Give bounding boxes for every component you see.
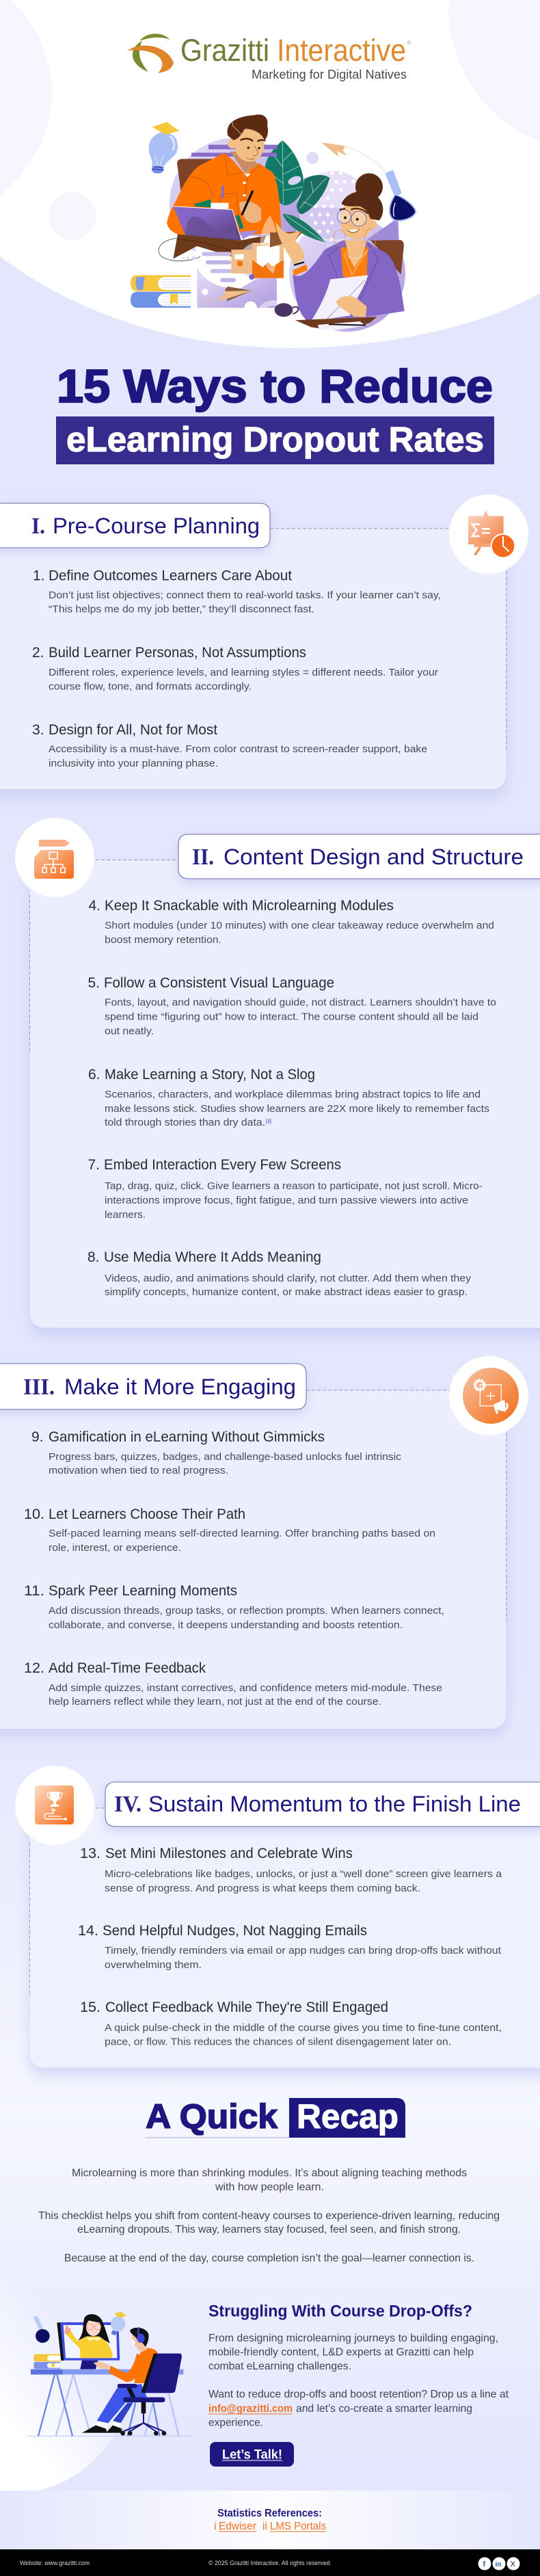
recap heading: A Quick: [146, 2097, 278, 2136]
recap text: This checklist helps you shift from content-heavy courses to experience-driven learning, reducing: [38, 2210, 500, 2222]
item 12: [24, 1660, 442, 1708]
section II heading: II.: [192, 845, 214, 870]
item 7: 7.: [87, 1157, 100, 1173]
header white blob with soft corner shapes: [0, 0, 540, 348]
item 5: Follow a Consistent Visual Language: [104, 975, 334, 991]
illustration: online learner at desk: [27, 2312, 193, 2436]
recap text: Because at the end of the day, course completion isn’t the goal—learner connection is.: [64, 2253, 474, 2264]
hero illustration: two colleagues working: [131, 114, 416, 333]
recap text: eLearning dropouts. This way, learners stay focused, feel seen, and finish strong.: [77, 2224, 461, 2235]
icon: social links: in: [495, 2561, 501, 2568]
item 9: [31, 1429, 402, 1476]
item 6: 6.: [88, 1067, 100, 1083]
recap text: with how people learn.: [215, 2181, 324, 2193]
call to action: mobile-friendly content, L&D experts at Grazitti can help: [208, 2347, 474, 2359]
item 5: Fonts, layout, and navigation should guide, not distract. Learners shouldn’t have to: [105, 997, 496, 1008]
logo: Grazitti Interactive: Grazitti: [180, 33, 269, 68]
item 4: boost memory retention.: [105, 934, 221, 946]
item 3: Accessibility is a must-have. From color contrast to screen-reader support, bake: [49, 743, 427, 755]
item 11: Add discussion threads, group tasks, or reflection prompts. When learners connect,: [49, 1605, 444, 1617]
title: 15 Ways to Reduce: [57, 360, 493, 412]
statistics references band: Statistics References:: [217, 2508, 322, 2519]
item 10: role, interest, or experience.: [49, 1542, 181, 1554]
item 9: 9.: [31, 1429, 44, 1445]
item 2: 2.: [32, 645, 44, 661]
item 14: [78, 1923, 502, 1971]
item 13: sense of progress. And progress is what keeps them coming back.: [105, 1883, 420, 1894]
call to action: combat eLearning challenges.: [208, 2361, 351, 2372]
call to action: and let’s co-create a smarter learning: [296, 2403, 472, 2415]
item 7: learners.: [105, 1209, 146, 1221]
logo: Grazitti Interactive: Marketing for Digital Natives: [252, 68, 407, 81]
item 7: Embed Interaction Every Few Screens: [104, 1157, 341, 1173]
logo: Grazitti Interactive: ®: [407, 40, 411, 46]
section I heading: [0, 503, 270, 548]
section II heading: [178, 834, 540, 879]
subtitle banner: eLearning Dropout Rates: [66, 420, 484, 459]
item 3: Design for All, Not for Most: [49, 722, 217, 738]
recap text: [38, 2168, 500, 2264]
section II panel: Content Design and Structure: [15, 818, 540, 1328]
item 14: Send Helpful Nudges, Not Nagging Emails: [103, 1923, 367, 1939]
item 5: spend time “figuring out” how to interact. The course content should all be laid: [105, 1011, 478, 1023]
item 5: out neatly.: [105, 1026, 154, 1037]
item 8: 8.: [87, 1249, 100, 1265]
item 2: course flow, tone, and formats accordingly.: [49, 681, 252, 692]
item 8: Videos, audio, and animations should clarify, not clutter. Add them when they: [105, 1273, 472, 1284]
bottom left white glow: [0, 2252, 131, 2494]
item 13: 13.: [80, 1846, 100, 1861]
item 3: inclusivity into your planning phase.: [49, 758, 218, 769]
call to action: experience.: [208, 2417, 263, 2429]
footer: © 2025 Grazitti Interactive. All rights reserved.: [208, 2560, 332, 2567]
item 11: [24, 1583, 444, 1631]
item 15: [80, 2000, 502, 2048]
item 8: [87, 1249, 472, 1298]
section IV heading: IV.: [114, 1792, 141, 1817]
item 1: “This helps me do my job better,” they’ll disconnect fast.: [49, 604, 314, 615]
item 9: Progress bars, quizzes, badges, and challenge-based unlocks fuel intrinsic: [49, 1451, 402, 1463]
translucent steam swirl: [258, 215, 288, 333]
icon: gear, plus and megaphone: [449, 1356, 528, 1435]
statistics references band: LMS Portals: [270, 2521, 326, 2532]
item 11: collaborate, and converse, it deepens understanding and boosts retention.: [49, 1619, 403, 1631]
button: Let's Talk: Let’s Talk!: [222, 2448, 282, 2462]
call to action: Want to reduce drop-offs and boost retention? Drop us a line at: [208, 2389, 509, 2400]
recap heading: Recap: [297, 2097, 399, 2136]
item 11: Spark Peer Learning Moments: [49, 1583, 237, 1599]
item 4: Short modules (under 10 minutes) with one clear takeaway reduce overwhelm and: [105, 920, 494, 931]
item 3: 3.: [32, 722, 44, 738]
item 1: Don’t just list objectives; connect them to real-world tasks. If your learner can’t say,: [49, 589, 441, 601]
item 7: Tap, drag, quiz, click. Give learners a reason to participate, not just scroll. Micro-: [105, 1180, 483, 1192]
call to action: [208, 2302, 509, 2467]
item 8: simplify concepts, humanize content, or make abstract ideas easier to grasp.: [105, 1286, 468, 1298]
item 1: Define Outcomes Learners Care About: [49, 568, 292, 584]
item 6: make lessons stick. Studies show learners are 22X more likely to remember facts: [105, 1103, 489, 1115]
item 1: [33, 568, 441, 615]
icon: easel and clock: [449, 494, 528, 574]
item 14: 14.: [78, 1923, 98, 1939]
section I heading: Pre-Course Planning: [53, 514, 260, 538]
statistics references band: ii: [262, 2521, 267, 2532]
item 14: Timely, friendly reminders via email or app nudges can bring drop-offs back without: [105, 1945, 502, 1956]
item 6: [88, 1067, 489, 1128]
item 5: [87, 975, 496, 1037]
icon: social links: X: [510, 2560, 515, 2568]
section I panel: Pre-Course Planning: [0, 494, 528, 789]
section III panel: Make it More Engaging: [0, 1356, 528, 1729]
item 3: [32, 722, 427, 769]
item 10: Let Learners Choose Their Path: [49, 1506, 245, 1522]
item 10: Self-paced learning means self-directed learning. Offer branching paths based on: [49, 1528, 435, 1539]
statistics references band: i: [214, 2521, 216, 2532]
footer: Website: www.grazitti.com: [20, 2560, 90, 2567]
item 7: [87, 1157, 483, 1221]
section IV panel: Sustain Momentum to the Finish Line: [15, 1766, 540, 2068]
section III heading: III.: [23, 1375, 55, 1400]
item 2: Different roles, experience levels, and learning styles = different needs. Tailor your: [49, 667, 438, 678]
icon: document with flow chart: [15, 818, 94, 897]
statistics references band: [0, 2491, 540, 2549]
item 6: Scenarios, characters, and workplace dilemmas bring abstract topics to life and: [105, 1089, 481, 1100]
item 4: [89, 898, 494, 946]
item 13: Micro-celebrations like badges, unlocks, or just a “well done” screen give learners a: [105, 1868, 502, 1880]
item 2: [32, 645, 438, 692]
section III heading: [0, 1364, 306, 1409]
item 12: 12.: [24, 1660, 44, 1676]
call to action: Struggling With Course Drop-Offs?: [208, 2302, 472, 2321]
section IV heading: Sustain Momentum to the Finish Line: [148, 1792, 521, 1816]
item 6: [ii]: [266, 1118, 271, 1124]
title: [56, 360, 494, 464]
item 13: Set Mini Milestones and Celebrate Wins: [105, 1846, 353, 1861]
recap heading: [145, 2097, 405, 2138]
item 15: pace, or flow. This reduces the chances of silent disengagement later on.: [105, 2036, 451, 2048]
item 8: Use Media Where It Adds Meaning: [104, 1249, 321, 1265]
icon: social links: [478, 2558, 519, 2570]
button: Let's Talk: [210, 2442, 294, 2467]
item 12: help learners reflect while they learn, not just at the end of the course.: [49, 1696, 381, 1708]
item 9: motivation when tied to real progress.: [49, 1465, 228, 1476]
call to action: info@grazitti.com: [208, 2403, 293, 2415]
item 5: 5.: [87, 975, 100, 991]
statistics references band: Edwiser: [219, 2521, 256, 2532]
item 12: Add Real-Time Feedback: [49, 1660, 206, 1676]
icon: social links: f: [483, 2560, 485, 2568]
item 4: 4.: [89, 898, 100, 914]
footer: [0, 2549, 540, 2576]
section I heading: I.: [31, 514, 45, 539]
item 14: overwhelming them.: [105, 1959, 202, 1971]
item 7: interactions improve focus, fight fatigue, and turn passive viewers into active: [105, 1195, 468, 1206]
item 13: [80, 1846, 502, 1894]
item 11: 11.: [24, 1583, 44, 1599]
recap text: Microlearning is more than shrinking modules. It’s about aligning teaching methods: [72, 2168, 467, 2179]
item 15: A quick pulse-check in the middle of the course gives you time to fine-tune content,: [105, 2022, 502, 2034]
item 1: 1.: [33, 568, 45, 584]
section IV heading: [105, 1782, 540, 1827]
item 10: [24, 1506, 435, 1554]
item 6: told through stories than dry data.: [105, 1117, 265, 1128]
icon: trophy and path: [15, 1766, 94, 1845]
section III heading: Make it More Engaging: [64, 1375, 296, 1399]
item 12: Add simple quizzes, instant correctives, and confidence meters mid-module. These: [49, 1682, 442, 1694]
item 6: Make Learning a Story, Not a Slog: [105, 1067, 315, 1083]
logo: Grazitti Interactive: Interactive: [277, 33, 406, 68]
item 9: Gamification in eLearning Without Gimmicks: [49, 1429, 325, 1445]
logo: Grazitti Interactive: [128, 33, 411, 81]
call to action: From designing microlearning journeys to building engaging,: [208, 2333, 498, 2344]
item 10: 10.: [24, 1506, 44, 1522]
item 2: Build Learner Personas, Not Assumptions: [49, 645, 306, 661]
item 15: Collect Feedback While They're Still Engaged: [105, 2000, 388, 2015]
section II heading: Content Design and Structure: [224, 845, 524, 869]
item 15: 15.: [80, 2000, 100, 2015]
item 4: Keep It Snackable with Microlearning Modules: [105, 898, 394, 914]
